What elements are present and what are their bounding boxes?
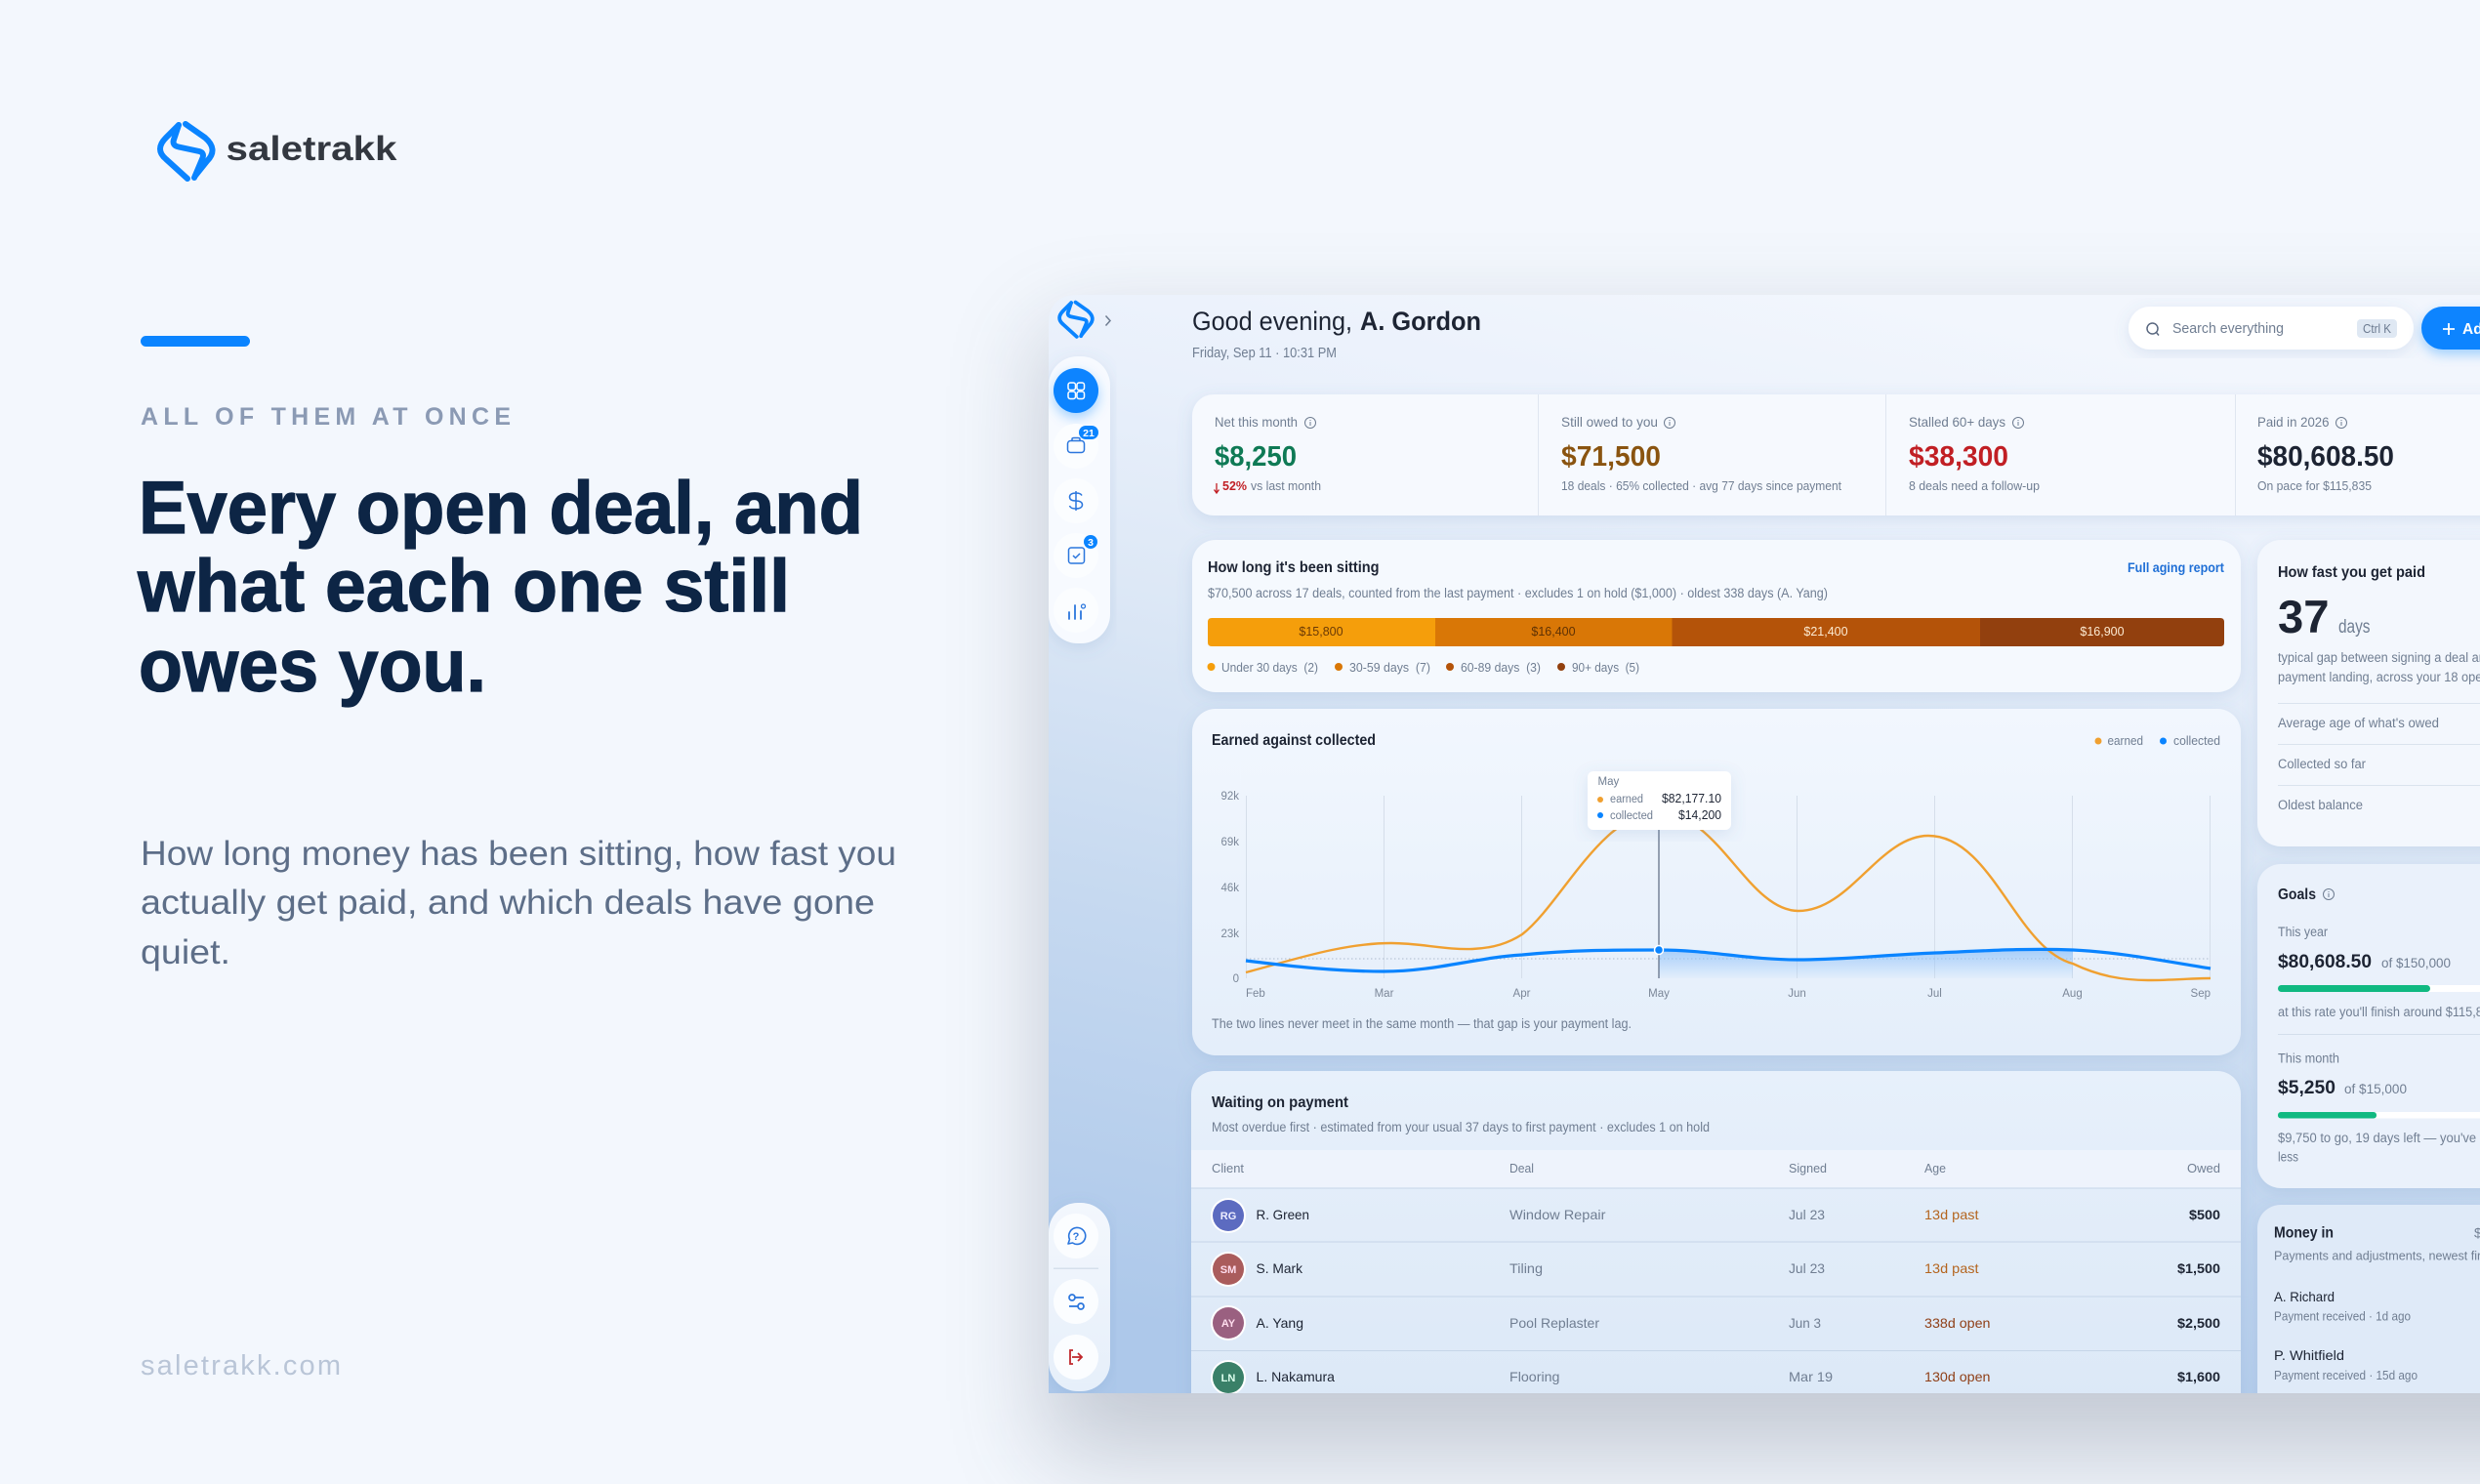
chart legend: earned: [2107, 733, 2143, 748]
card heading: How fast you get paid: [2278, 564, 2425, 581]
tooltip: collected: [1610, 810, 1653, 822]
stacked aging bar: $21,400: [1803, 625, 1848, 639]
y axis labels: [1220, 791, 1239, 985]
payment: P. Whitfield: Payment received · 15d ago: [2274, 1369, 2418, 1382]
panel: money in: [2257, 1205, 2480, 1459]
nav: dashboard active: [1054, 368, 1098, 413]
table header: Owed: [2187, 1161, 2220, 1175]
x axis labels: [1246, 988, 2211, 1000]
panel: goals: [2257, 864, 2480, 1188]
nav: help: ?: [1073, 1231, 1080, 1243]
kpi: stalled: 8 deals need a follow-up: [1909, 478, 2040, 493]
row: A. Yang: A. Yang: [1256, 1315, 1303, 1331]
aging legend: 30-59 days (7): [1349, 660, 1430, 675]
chart legend: collected: [2173, 733, 2220, 748]
y axis labels: 46k: [1220, 883, 1239, 894]
brand logo: [160, 124, 397, 179]
hover point: [1654, 945, 1664, 955]
tooltip: earned: [1610, 794, 1643, 805]
x axis labels: Apr: [1513, 988, 1531, 1000]
body copy: How long money has been sitting, how fast you: [141, 835, 896, 873]
row: S. Mark: SM: [1220, 1264, 1236, 1276]
nav: settings: [1054, 1279, 1098, 1324]
stat rows: Average age of what's owed: [2278, 716, 2439, 730]
kpi: still owed: Still owed to you: [1561, 414, 1658, 430]
kpi: net this month: vs last month: [1251, 478, 1321, 493]
tooltip: [1588, 771, 1731, 830]
row: S. Mark: S. Mark: [1256, 1260, 1303, 1276]
payment: A. Richard: A. Richard: [2274, 1289, 2335, 1304]
kpi: net this month: $8,250: [1215, 441, 1297, 473]
goal: this month: $5,250: [2278, 1078, 2335, 1098]
y axis labels: 92k: [1220, 791, 1239, 803]
greeting: A. Gordon: [1360, 307, 1481, 336]
goal: this month: of $15,000: [2344, 1082, 2407, 1096]
table subtitle: Most overdue first · estimated from your usual 37 days to first payment · excludes 1 on hold: [1212, 1120, 1710, 1134]
table header: Client: [1212, 1161, 1244, 1175]
body copy: quiet.: [141, 933, 230, 971]
row: L. Nakamura: L. Nakamura: [1256, 1369, 1335, 1384]
nav: analytics: [1068, 603, 1086, 620]
row: R. Green: RG: [1220, 1211, 1236, 1222]
stacked aging bar: $15,800: [1299, 625, 1343, 639]
payment: P. Whitfield: P. Whitfield: [2274, 1347, 2344, 1363]
kpi: paid in 2026: $80,608.50: [2257, 441, 2394, 473]
payment: P. Whitfield: [2274, 1347, 2418, 1382]
nav: tasks with badge 3: [1068, 535, 1097, 564]
greeting: [1193, 310, 1480, 360]
row: L. Nakamura: LN: [1221, 1373, 1235, 1384]
kpi: still owed: $71,500: [1561, 441, 1661, 473]
row: S. Mark: Tiling: [1509, 1260, 1543, 1276]
panel: how fast you get paid: [2257, 540, 2480, 846]
table header: [1191, 1150, 2241, 1189]
tooltip: $82,177.10: [1662, 792, 1721, 805]
row: R. Green: $500: [2189, 1207, 2220, 1222]
headline: [137, 467, 863, 708]
goal: this year: of $150,000: [2381, 956, 2451, 970]
y axis labels: 0: [1233, 973, 1239, 985]
line chart: [1220, 771, 2211, 1000]
panel: aging: [1192, 540, 2241, 692]
wordmark: saletrakk: [227, 130, 397, 168]
nav: deals with badge 21: 21: [1083, 428, 1095, 439]
chart heading: Earned against collected: [1212, 732, 1376, 749]
icon: expand chevron: [1105, 316, 1110, 326]
row: A. Yang: Pool Replaster: [1509, 1315, 1599, 1331]
eyebrow: ALL OF THEM AT ONCE: [141, 403, 511, 431]
row: S. Mark: $1,500: [2177, 1260, 2220, 1276]
row: A. Yang: $2,500: [2177, 1315, 2220, 1331]
search box: Search everything: [2172, 320, 2284, 337]
payment: A. Richard: [2274, 1289, 2411, 1324]
description: [2278, 650, 2480, 684]
table heading: Waiting on payment: [1212, 1094, 1348, 1111]
table header: Age: [1924, 1161, 1946, 1175]
nav: deals with badge 21: [1066, 424, 1098, 453]
row: L. Nakamura: [1211, 1360, 2220, 1395]
row: L. Nakamura: Mar 19: [1789, 1369, 1833, 1384]
row: R. Green: 13d past: [1924, 1207, 1979, 1222]
kpi strip: [1192, 394, 2480, 515]
stacked aging bar: $16,900: [2080, 625, 2125, 639]
kpi: paid in 2026: On pace for $115,835: [2257, 478, 2372, 493]
aging legend: 60-89 days (3): [1461, 660, 1541, 675]
earned line: [1246, 812, 2211, 980]
row: S. Mark: Jul 23: [1789, 1260, 1825, 1276]
row: A. Yang: Jun 3: [1789, 1315, 1821, 1331]
area under collected: [1659, 949, 2073, 978]
y axis labels: 23k: [1220, 928, 1239, 940]
row: R. Green: R. Green: [1256, 1207, 1309, 1222]
goal: this year: [2278, 925, 2480, 1019]
tooltip: $14,200: [1678, 808, 1721, 822]
panel: how fast you get paid: days: [2338, 617, 2371, 638]
x axis labels: Jun: [1788, 988, 1806, 1000]
kpi: paid in 2026: [2257, 414, 2394, 493]
kpi: stalled: Stalled 60+ days: [1909, 414, 2005, 430]
x axis labels: Sep: [2191, 988, 2211, 1000]
nav: dollar: [1068, 491, 1084, 511]
icon: saletrakk mark: [160, 124, 213, 179]
dashboard window: [1049, 295, 2480, 1462]
nav: sign out: [1054, 1335, 1098, 1380]
search box: Ctrl K: [2363, 322, 2392, 336]
body copy: actually get paid, and which deals have gone: [141, 884, 875, 922]
greeting: Good evening,: [1192, 307, 1352, 336]
row: S. Mark: 13d past: [1924, 1260, 1979, 1276]
sidebar logo: [1059, 303, 1110, 337]
kpi: net this month: 52%: [1222, 478, 1247, 493]
goal: this month: less: [2278, 1150, 2298, 1164]
body copy: [141, 835, 896, 971]
goal: this month: [2278, 1051, 2480, 1164]
row: R. Green: Window Repair: [1509, 1207, 1606, 1222]
x axis labels: Feb: [1246, 988, 1265, 1000]
nav: tasks with badge 3: 3: [1088, 537, 1094, 549]
website url: saletrakk.com: [141, 1350, 341, 1381]
chart legend: [2095, 733, 2220, 748]
goals heading: Goals: [2278, 886, 2316, 903]
kpi: paid in 2026: Paid in 2026: [2257, 414, 2330, 430]
headline: what each one still: [137, 545, 790, 628]
aging legend: Under 30 days (2): [1221, 660, 1318, 675]
aging subtitle: $70,500 across 17 deals, counted from the last payment · excludes 1 on hold ($1,000) · oldest 338 days (A. Yang): [1208, 586, 1828, 600]
icon: search: [2147, 323, 2159, 336]
kpi: net this month: [1215, 414, 1321, 493]
stat rows: [2278, 716, 2439, 812]
stacked aging bar: $16,400: [1531, 625, 1576, 639]
headline: owes you.: [139, 625, 486, 708]
stacked aging bar: [1208, 618, 2224, 646]
add button: [2421, 307, 2480, 350]
stat rows: Oldest balance: [2278, 798, 2363, 812]
aging legend: 90+ days (5): [1572, 660, 1639, 675]
icon: logo mark: [1059, 303, 1093, 337]
link: full aging report: Full aging report: [2128, 559, 2224, 575]
row: L. Nakamura: 130d open: [1924, 1369, 1990, 1384]
row: R. Green: [1211, 1198, 2220, 1233]
accent bar: [141, 336, 250, 347]
greeting: Friday, Sep 11 · 10:31 PM: [1192, 346, 1337, 361]
row: S. Mark: [1211, 1252, 2220, 1287]
tooltip: May: [1597, 776, 1619, 788]
table header: Signed: [1789, 1161, 1827, 1175]
panel: waiting on payment table: [1191, 1071, 2241, 1462]
sidebar bottom nav: [1049, 1203, 1110, 1391]
aging legend: [1207, 660, 1639, 675]
x axis labels: Aug: [2062, 988, 2083, 1000]
goal: this year: $80,608.50: [2278, 952, 2372, 972]
row: A. Yang: [1211, 1305, 2220, 1340]
sidebar top nav: [1049, 356, 1110, 643]
kpi: net this month: Net this month: [1215, 414, 1298, 430]
stat rows: Collected so far: [2278, 757, 2366, 771]
table header: Deal: [1509, 1161, 1534, 1175]
money in heading: Money in: [2274, 1224, 2334, 1242]
row: R. Green: Jul 23: [1789, 1207, 1825, 1222]
collected line: [1246, 949, 2211, 971]
kpi: still owed: [1561, 414, 1841, 493]
x axis labels: Jul: [1927, 988, 1942, 1000]
row: L. Nakamura: $1,600: [2177, 1369, 2220, 1384]
y axis labels: 69k: [1220, 837, 1239, 848]
chart footnote: The two lines never meet in the same month — that gap is your payment lag.: [1212, 1016, 1632, 1031]
big number: 37: [2278, 591, 2330, 642]
kpi: stalled: [1909, 414, 2040, 493]
row: A. Yang: 338d open: [1924, 1315, 1990, 1331]
kpi: still owed: 18 deals · 65% collected · avg 77 days since payment: [1561, 478, 1841, 493]
row: A. Yang: AY: [1221, 1318, 1236, 1330]
search box: [2129, 307, 2414, 350]
goal: this month: This month: [2278, 1051, 2339, 1066]
payment: A. Richard: Payment received · 1d ago: [2274, 1310, 2411, 1324]
x axis labels: Mar: [1375, 988, 1394, 1000]
aging heading: How long it's been sitting: [1208, 559, 1379, 576]
nav: help: [1054, 1214, 1098, 1258]
window shadow: [1045, 332, 2480, 1455]
goal: this year: This year: [2278, 925, 2328, 939]
panel: earned against collected chart: [1192, 709, 2241, 1055]
hover line: [1658, 830, 1660, 978]
headline: Every open deal, and: [139, 467, 863, 550]
row: L. Nakamura: Flooring: [1509, 1369, 1560, 1384]
kpi: stalled: $38,300: [1909, 441, 2008, 473]
x axis labels: May: [1648, 988, 1670, 1000]
